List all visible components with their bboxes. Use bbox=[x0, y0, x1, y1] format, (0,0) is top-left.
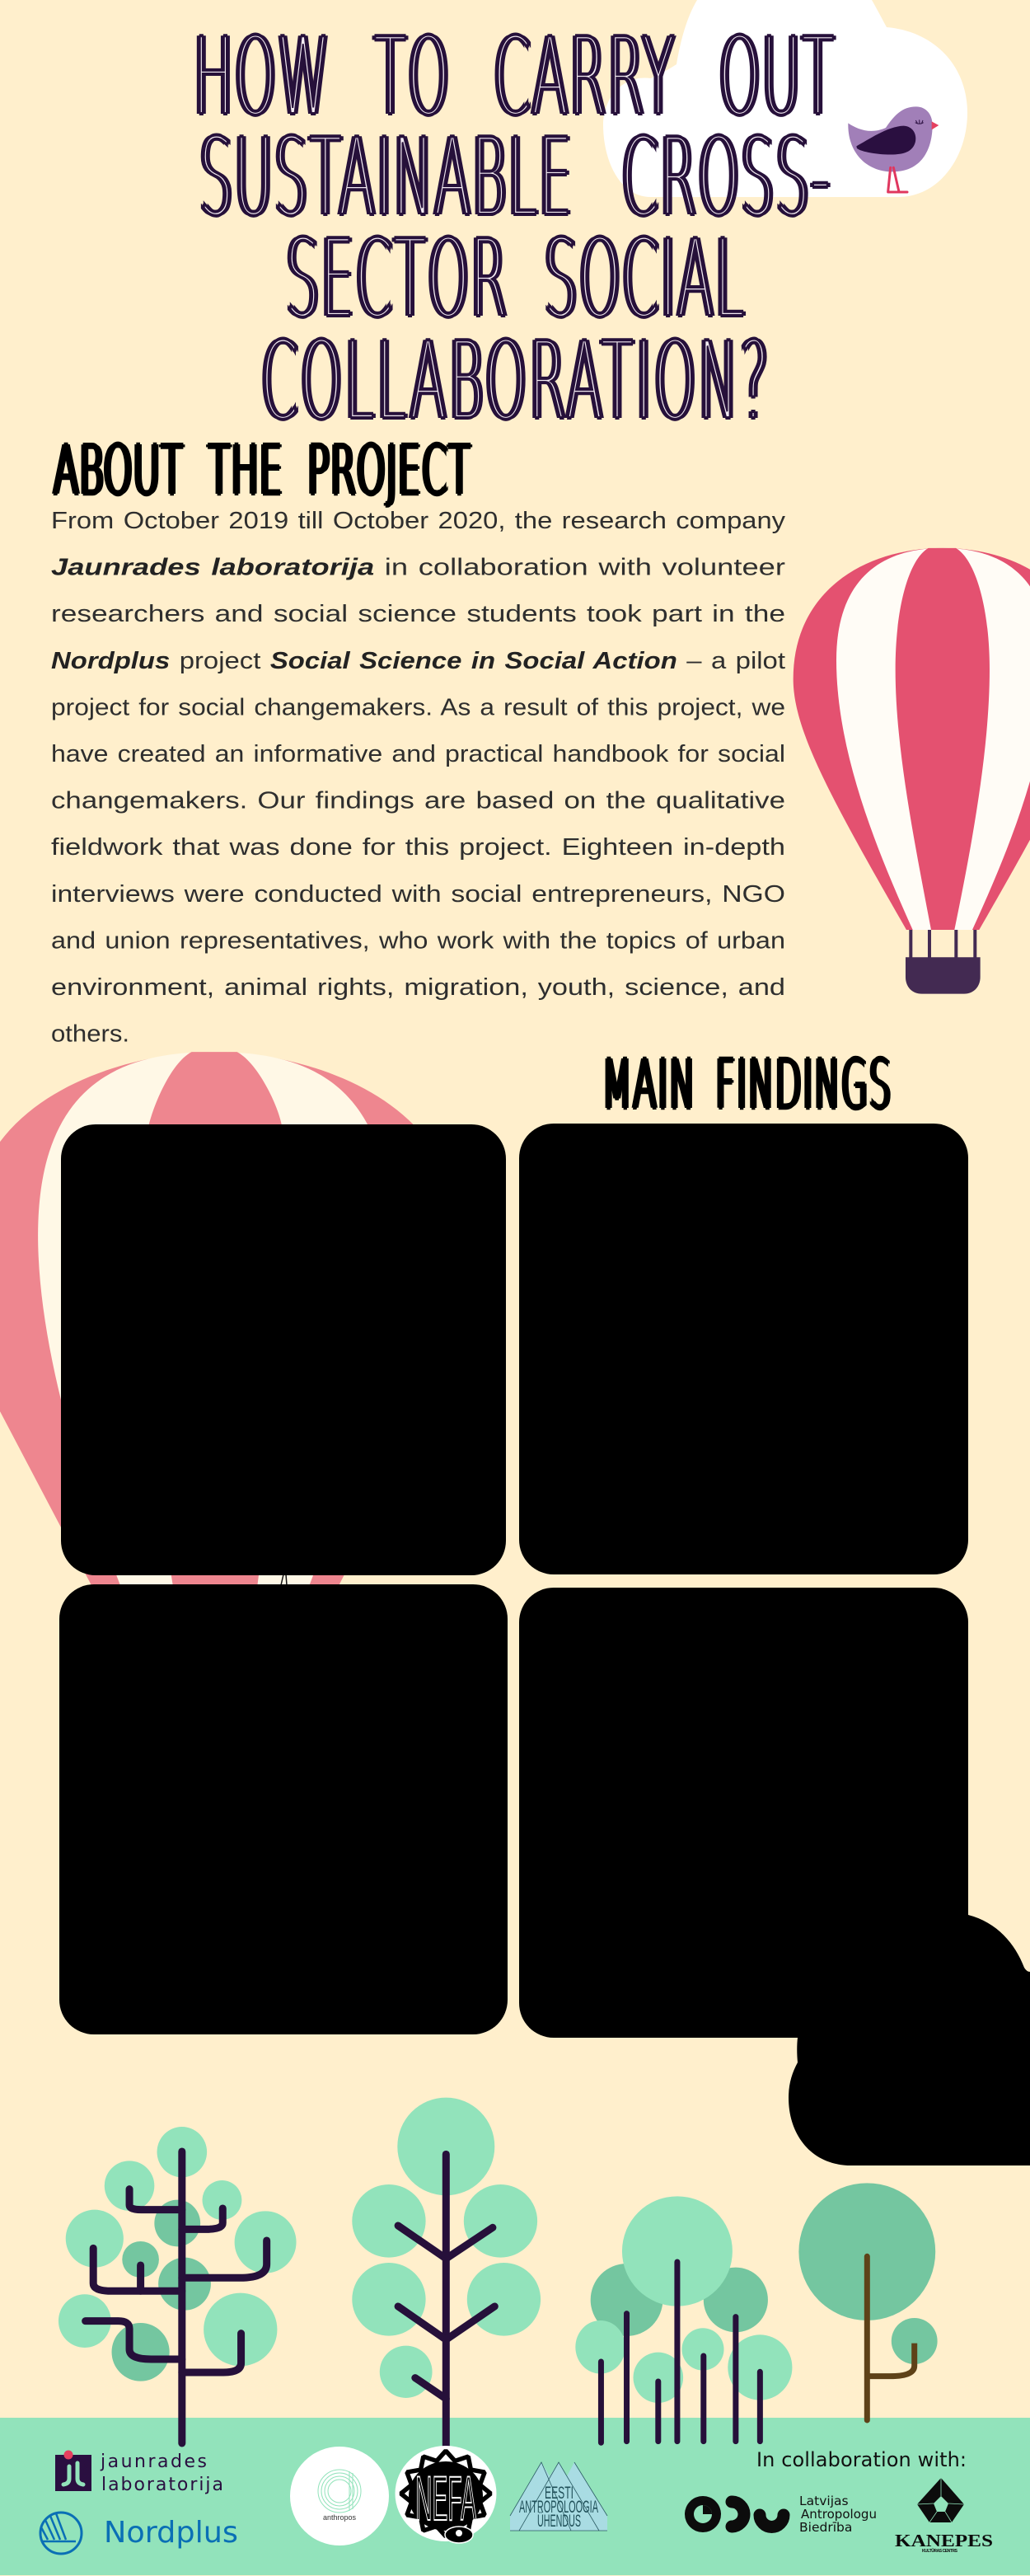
text block: about the project: Nordplus project Social Science in Social Action – a pilot bbox=[51, 648, 785, 674]
logo: kanepes: KANEPES bbox=[895, 2531, 993, 2550]
panel: finding 2 bbox=[519, 1124, 968, 1574]
logo: eesti antropoloogia uhendus: ANTROPOLOOGIA bbox=[519, 2498, 598, 2517]
logo: nordplus: Nordplus bbox=[104, 2516, 238, 2550]
text block: about the project: have created an informative and practical handbook for social bbox=[51, 741, 785, 767]
text block: about the project bbox=[51, 508, 786, 1048]
logo: jaunrades laboratorija bbox=[55, 2450, 223, 2495]
logo: eesti antropoloogia uhendus: EESTI bbox=[545, 2484, 574, 2503]
text block: about the project: environment, animal rights, migration, youth, science, and bbox=[51, 974, 785, 1001]
panel: finding 3 bbox=[59, 1584, 508, 2034]
balloon ropes bbox=[281, 1574, 287, 1585]
text block: about the project: fieldwork that was done for this project. Eighteen in-depth bbox=[51, 834, 785, 861]
logo: anthropos: anthropos bbox=[323, 2513, 357, 2522]
text block: about the project: researchers and social science students took part in the bbox=[51, 601, 785, 627]
text block: about the project: others. bbox=[51, 1021, 129, 1048]
title: COLLABORATION? bbox=[261, 318, 771, 443]
heading: about the project: ABOUT THE PROJECT bbox=[54, 432, 471, 510]
text block: about the project: changemakers. Our findings are based on the qualitative bbox=[51, 788, 785, 814]
logo: round black and white emblem bbox=[396, 2446, 496, 2543]
black cloud bbox=[789, 1915, 1030, 2165]
illustration: red hot air balloon bbox=[794, 548, 1030, 994]
infographic page: NEFA bbox=[415, 2464, 476, 2534]
panel: finding 4 bbox=[519, 1588, 968, 2038]
text block: about the project: project for social changemakers. As a result of this project, we bbox=[51, 694, 785, 720]
icon: purple bird bbox=[848, 106, 939, 192]
logo: eesti antropoloogia uhendus bbox=[510, 2462, 607, 2531]
panel: finding 1 bbox=[61, 1124, 506, 1575]
title: SECTOR SOCIAL bbox=[286, 216, 746, 341]
logo: latvijas antropologu biedriba: Biedrība bbox=[799, 2520, 852, 2535]
title: HOW TO CARRY OUT bbox=[194, 14, 836, 139]
tree 2 bbox=[352, 2098, 541, 2447]
tree 1 bbox=[59, 2127, 297, 2443]
logo: eesti antropoloogia uhendus: ÜHENDUS bbox=[537, 2512, 581, 2531]
text: in collaboration with: In collaboration with: bbox=[756, 2448, 967, 2471]
logo: nordplus bbox=[40, 2513, 238, 2554]
text block: about the project: Jaunrades laboratorija in collaboration with volunteer bbox=[51, 555, 786, 581]
title bbox=[194, 14, 836, 443]
logo: jaunrades laboratorija: laboratorija bbox=[101, 2475, 223, 2495]
logo: jaunrades laboratorija: jaunrades bbox=[100, 2452, 207, 2472]
logo: latvijas antropologu biedriba: Antropologu bbox=[801, 2507, 877, 2522]
logo: anthropos bbox=[290, 2447, 389, 2546]
tree 3 bbox=[575, 2196, 792, 2442]
white cloud behind title bbox=[603, 0, 967, 197]
logo: kanepes bbox=[895, 2478, 993, 2554]
illustration: pink hot air balloon bbox=[0, 1052, 459, 1588]
text block: about the project: and union representatives, who work with the topics of urban bbox=[51, 927, 785, 954]
logo: latvijas antropologu biedriba: Latvijas bbox=[799, 2494, 849, 2508]
title: SUSTAINABLE CROSS- bbox=[199, 115, 831, 240]
logo: kanepes: KULTŪRAS CENTRS bbox=[922, 2548, 958, 2554]
text block: about the project: interviews were conducted with social entrepreneurs, NGO bbox=[51, 881, 785, 908]
text block: about the project: From October 2019 till October 2020, the research company bbox=[51, 508, 786, 534]
heading: main findings: MAIN FINDINGS bbox=[602, 1046, 892, 1124]
logo: latvijas antropologu biedriba bbox=[685, 2494, 877, 2535]
tree 4 bbox=[798, 2183, 938, 2420]
mint footer band bbox=[0, 2418, 1030, 2575]
